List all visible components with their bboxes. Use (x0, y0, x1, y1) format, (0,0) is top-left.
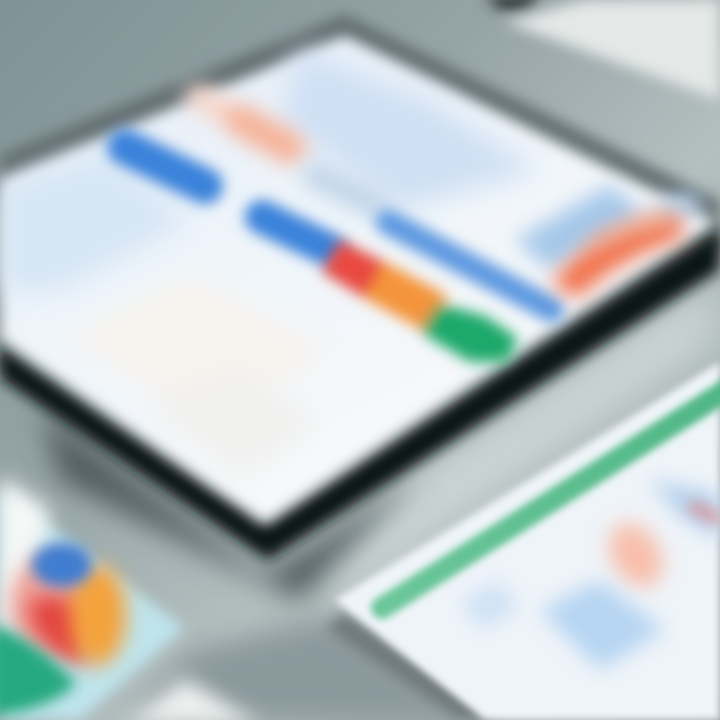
pie chart (0, 543, 126, 716)
light blue chart block (515, 185, 645, 270)
screen top blue tint (280, 50, 540, 210)
blue bar left (125, 147, 205, 186)
long blue bar (388, 222, 552, 310)
red slice (30, 597, 88, 665)
screen left blue tint (0, 155, 190, 290)
blue accent near corner (650, 190, 702, 225)
card: bottom left pie chart (0, 475, 185, 720)
red accent (690, 505, 720, 520)
card: bottom centre small white sheet (125, 678, 260, 720)
card white top-left area (0, 475, 50, 640)
desk lower shade (130, 620, 470, 720)
peach mark (598, 514, 674, 596)
card sheet (335, 362, 720, 720)
faint blue mid bar (315, 175, 375, 205)
orange arc highlight (590, 216, 672, 245)
red orange green bar (322, 240, 518, 362)
tablet black lower bezel (0, 228, 720, 560)
tablet shadow (40, 410, 420, 600)
orange slice (70, 565, 126, 665)
red orange arc (552, 216, 682, 298)
card: top right (485, 0, 720, 100)
blue red accents at right (650, 480, 720, 540)
green bar (382, 388, 720, 608)
card sheet (0, 488, 185, 720)
card edge shadow (325, 612, 505, 720)
small blue block (460, 580, 520, 630)
desk light patch (300, 280, 720, 600)
screen bottom table block (150, 370, 320, 480)
blue chart block (540, 580, 665, 670)
screen lower table block (70, 275, 330, 430)
tablet screen (0, 36, 716, 524)
blue bar middle (262, 217, 330, 250)
chart panel on screen right (515, 185, 702, 298)
blue slice (32, 543, 92, 587)
card: bottom right report (325, 362, 720, 720)
pale red halo (10, 555, 94, 655)
peach header bar (198, 97, 290, 148)
dark object at top edge (485, 0, 545, 12)
tablet gray top bezel (0, 14, 720, 550)
green slice (0, 625, 76, 716)
